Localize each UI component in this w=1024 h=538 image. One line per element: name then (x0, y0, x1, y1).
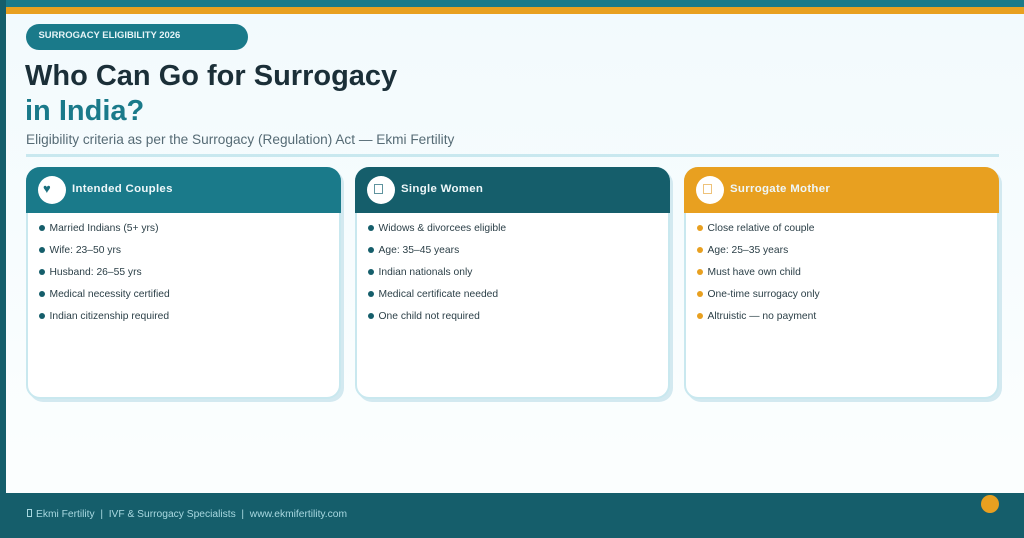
top amber bar (0, 7, 1024, 14)
icon: heart: ♥ (43, 181, 51, 196)
list: couples criteria (39, 223, 170, 322)
footer (0, 493, 1024, 538)
icon: footer placeholder (27, 509, 32, 517)
amber dot (981, 495, 999, 513)
list: couples criteria: Medical necessity certified (50, 289, 170, 300)
badge (26, 24, 248, 50)
list: couples criteria: Husband: 26–55 yrs (50, 267, 142, 278)
heading: single women: Single Women (401, 183, 483, 195)
list: single women criteria (368, 223, 506, 322)
left side bar (0, 0, 6, 538)
list: couples criteria: Indian citizenship required (50, 311, 169, 322)
list: single women criteria: One child not required (378, 311, 480, 322)
heading: surrogate mother: Surrogate Mother (730, 183, 830, 195)
list: single women criteria: Medical certificate needed (378, 289, 498, 300)
panel: single women (355, 167, 673, 402)
list: surrogate criteria: One-time surrogacy only (708, 289, 820, 300)
list: single women criteria: Indian nationals only (378, 267, 472, 278)
list: single women criteria: Widows & divorcees eligible (378, 223, 506, 234)
header divider (26, 154, 999, 157)
heading: intended couples: Intended Couples (72, 183, 173, 195)
list: couples criteria: Married Indians (5+ yrs) (50, 223, 159, 234)
badge: SURROGACY ELIGIBILITY 2026 (38, 30, 180, 41)
icon: single women placeholder (367, 176, 395, 204)
top teal bar (0, 0, 1024, 7)
footer text: Ekmi Fertility | IVF & Surrogacy Specialists | www.ekmifertility.com (36, 509, 347, 520)
subtitle: Eligibility criteria as per the Surrogacy (Regulation) Act — Ekmi Fertility (26, 132, 454, 147)
panel: intended couples (26, 167, 344, 402)
icon: heart (38, 176, 66, 204)
list: surrogate criteria (697, 223, 820, 322)
list: surrogate criteria: Age: 25–35 years (708, 245, 788, 256)
list: surrogate criteria: Close relative of couple (708, 223, 815, 234)
title line 2: in India? (25, 95, 144, 127)
list: surrogate criteria: Altruistic — no payment (708, 311, 816, 322)
header: single women (355, 167, 670, 213)
header: surrogate mother (684, 167, 999, 213)
panel: surrogate mother (684, 167, 1002, 402)
list: single women criteria: Age: 35–45 years (378, 245, 459, 256)
title line 1: Who Can Go for Surrogacy (25, 60, 397, 92)
list: couples criteria: Wife: 23–50 yrs (50, 245, 121, 256)
icon: surrogate mother placeholder (696, 176, 724, 204)
list: surrogate criteria: Must have own child (708, 267, 801, 278)
header: intended couples (26, 167, 341, 213)
